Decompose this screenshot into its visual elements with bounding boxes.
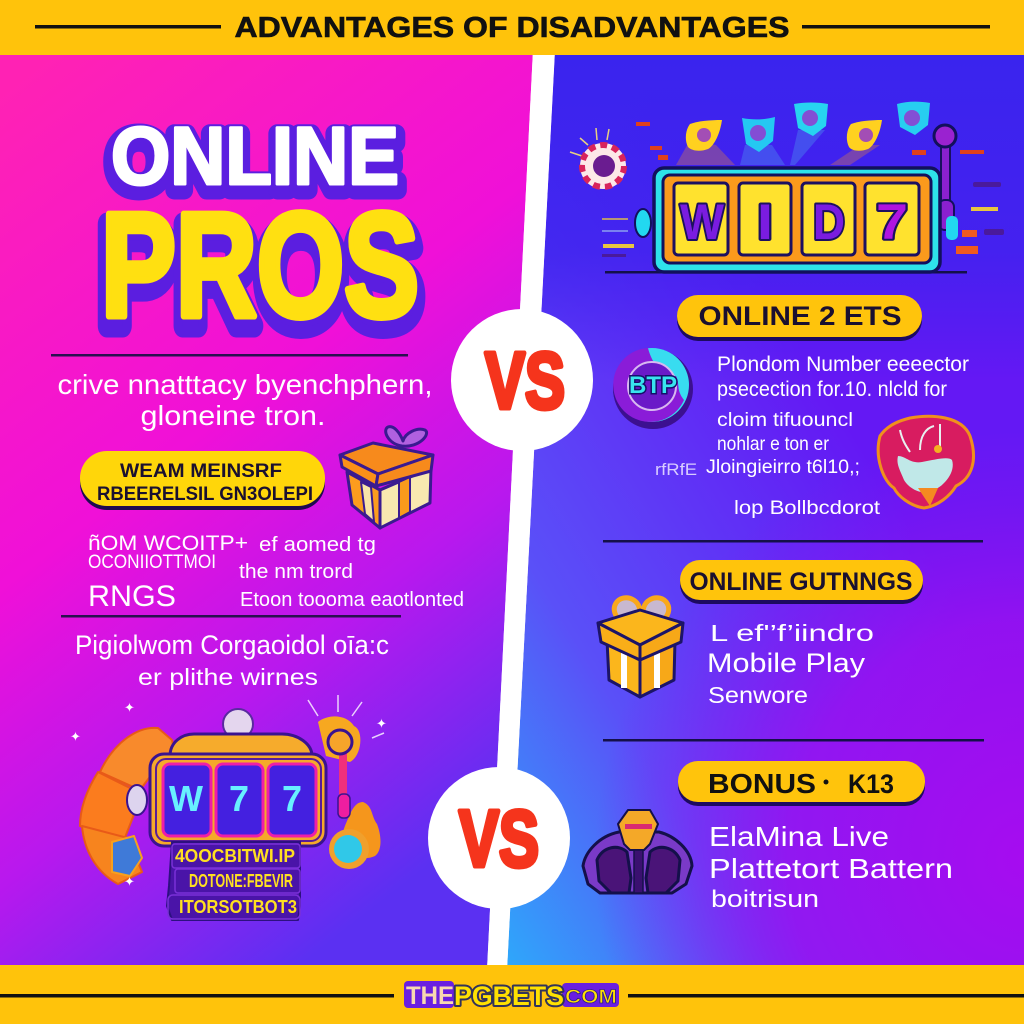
icon: red shield mascot (878, 416, 974, 508)
pros platform text: er plithe wirnes (138, 664, 318, 690)
sparkles: ✦ (376, 716, 387, 731)
pros platform text: Pigiolwom Corgaoidol oīa:c (75, 630, 389, 660)
nameplate: DOTONE:FBEVIR (189, 871, 293, 891)
reel symbols (169, 778, 302, 819)
cons rng text: Plondom Number eeeector (717, 353, 969, 376)
cons live text: boitrisun (711, 886, 819, 913)
cons live text (709, 821, 953, 913)
badge: pros feature: WEAM MEINSRF (120, 461, 282, 482)
pill: online gutings (680, 560, 923, 604)
floor line (605, 271, 967, 274)
badge: pros feature (80, 451, 325, 510)
cons rng text: psecection for.10. nlcld for (717, 378, 947, 401)
divider (51, 354, 408, 356)
title: online pros (99, 111, 421, 358)
gem token (112, 836, 142, 876)
title: online pros: PROS (99, 193, 421, 358)
reel letters (680, 194, 908, 250)
brand logo (404, 981, 619, 1011)
scroll wing (80, 728, 173, 884)
pill: online bets (677, 295, 922, 341)
icon: rtp coin: BTP (629, 372, 677, 399)
token badge (329, 829, 369, 869)
cons rng text (706, 353, 969, 519)
reels (674, 183, 919, 255)
scribble icon: rfRfE (655, 460, 697, 479)
cons mobile text: Senwore (708, 682, 808, 708)
pill: bonus: BONUS (708, 768, 816, 799)
side knobs (127, 785, 147, 815)
top case (170, 734, 312, 770)
reel letters: D (813, 194, 845, 250)
sparkles: ✦ (124, 874, 135, 889)
cons mobile text: Mobile Play (707, 648, 866, 678)
icon: gift box gold (598, 593, 683, 697)
bottom banner (0, 965, 1024, 1024)
icon: rtp coin (613, 348, 693, 429)
top banner (0, 0, 1024, 55)
pros intro text: gloneine tron. (140, 400, 326, 431)
badge: pros feature: RBEERELSIL GN3OLEPI (97, 484, 313, 505)
sparkles (70, 700, 387, 889)
icon: gift box pink (340, 427, 433, 528)
reel letters: W (680, 194, 725, 250)
divider (603, 739, 984, 742)
lever (934, 125, 956, 230)
reel letters: I (757, 194, 773, 250)
sparkles: ✦ (124, 700, 135, 715)
cabinet outer (654, 168, 940, 272)
vs badge lower: VS (459, 794, 539, 883)
vs badge upper (451, 309, 593, 451)
title: online pros: PROS (101, 183, 419, 348)
cons rng text: Jloingieirro t6l10,; (706, 457, 860, 478)
nameplate (167, 842, 300, 920)
side knobs (635, 209, 651, 237)
nameplate: 4OOCBITWI.IP (175, 846, 295, 866)
sunburst (308, 695, 384, 858)
brand logo: THE (406, 982, 454, 1010)
side bars (602, 182, 1004, 257)
illustration: wild slot machine (570, 102, 1004, 274)
illustration: neon slot machine (70, 695, 387, 920)
dome (223, 709, 253, 739)
vs badge upper: VS (485, 336, 565, 425)
pros platform text (75, 630, 389, 690)
pros detail text: ef aomed tg (259, 534, 376, 556)
reel symbols: W (169, 778, 203, 819)
brand logo: PGBETS (454, 981, 564, 1011)
reel letters: 7 (876, 194, 908, 250)
pros detail text: Etoon toooma eaotlonted (240, 589, 464, 611)
sparkles: ✦ (70, 729, 81, 744)
pros detail text: OCONIIOTTMOI (88, 552, 216, 573)
pill: bonus (678, 761, 925, 806)
cons rng text: cloim tifuouncl (717, 410, 853, 431)
cons live text: Plattetort Battern (709, 853, 953, 884)
reel symbols: 7 (229, 778, 249, 819)
light beams (676, 130, 880, 165)
cons rng text: lop Bollbcdorot (734, 498, 881, 519)
cabinet (150, 754, 326, 846)
reels (163, 764, 316, 836)
heading: ADVANTAGES OF DISADVANTAGES (234, 12, 790, 44)
panel: pros background (0, 50, 533, 970)
icon: robot player (583, 810, 692, 893)
floating symbols (636, 102, 984, 160)
pros detail text: ñOM WCOITP+ (88, 532, 248, 555)
divider (61, 615, 401, 618)
pill: online bets: ONLINE 2 ETS (698, 301, 902, 331)
cons live text: ElaMina Live (709, 821, 889, 852)
reel symbols: 7 (282, 778, 302, 819)
orb token (570, 128, 626, 189)
divider (603, 540, 983, 542)
cons mobile text: L ef'’f’iindro (710, 620, 874, 646)
pros detail text: the nm trord (239, 561, 353, 583)
pill: bonus: K13 (848, 769, 894, 799)
lever (328, 730, 352, 818)
pros intro text (58, 369, 432, 431)
panel: cons background (507, 50, 1024, 970)
pros intro text: crive nnatttacy byenchphern, (58, 369, 432, 400)
cabinet inner (663, 175, 931, 263)
nameplate: ITORSOTBOT3 (179, 897, 297, 917)
cons mobile text (707, 620, 874, 708)
cons rng text: nohlar e ton er (717, 434, 830, 455)
brand logo: COM (565, 987, 617, 1008)
vs badge lower (428, 767, 570, 909)
pill: online gutings: ONLINE GUTNNGS (690, 568, 912, 596)
title: online pros: ONLINE (109, 117, 401, 208)
title: online pros: ONLINE (111, 111, 399, 202)
pros detail text: RNGS (88, 580, 176, 613)
pros detail text (88, 532, 464, 613)
center diagonal divider (487, 50, 555, 970)
